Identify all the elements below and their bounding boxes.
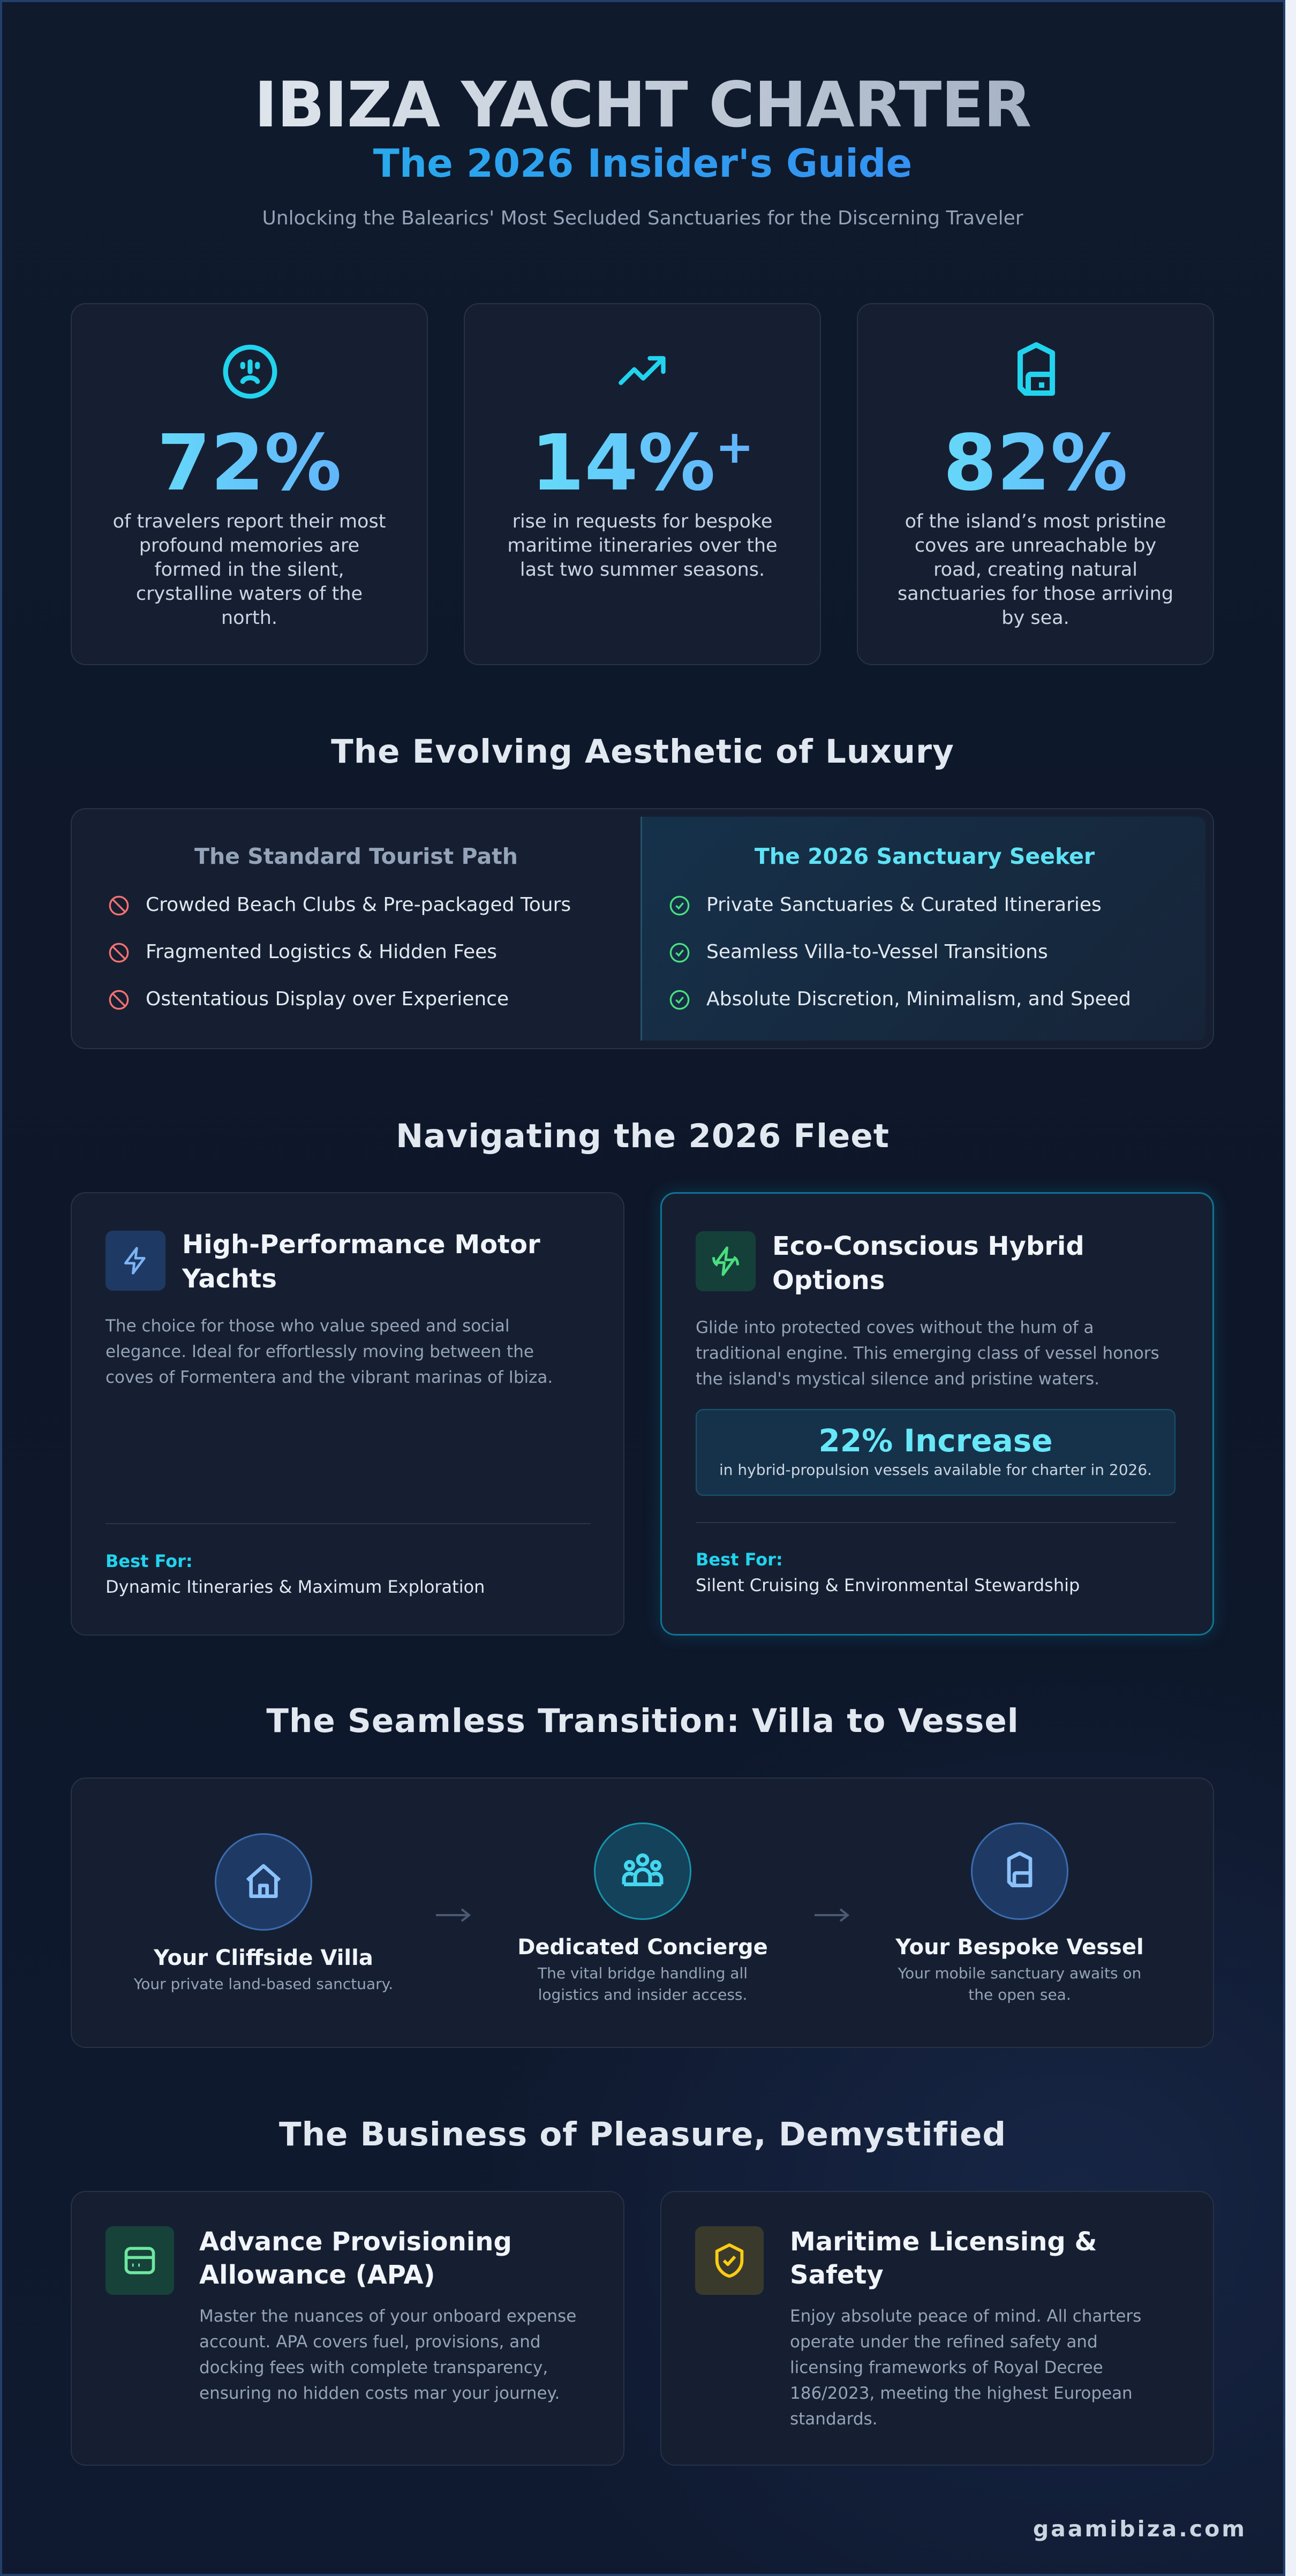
step: villa (134, 1833, 393, 1993)
icon: people (594, 1822, 691, 1920)
stat 82%: 82% (943, 418, 1128, 508)
label: Your Bespoke Vessel (895, 1935, 1144, 1960)
panel: transition flow (71, 1777, 1214, 2048)
title (2, 67, 1283, 142)
panel: licensing (660, 2191, 1214, 2466)
icon: vessel (971, 1822, 1068, 1920)
description: coves of Formentera and the vibrant marinas of Ibiza. (106, 1368, 553, 1387)
description: docking fees with complete transparency, (199, 2358, 548, 2377)
item (669, 988, 1131, 1010)
stat 82% (858, 424, 1213, 501)
sub (538, 1964, 748, 2003)
description: rise in requests for bespoke (513, 511, 772, 532)
description: traditional engine. This emerging class of vessel honors (696, 1344, 1159, 1363)
description: north. (221, 607, 277, 629)
icon: bolt (106, 1231, 165, 1291)
description: maritime itineraries over the (507, 535, 778, 556)
icon: vessel (1018, 342, 1055, 396)
footer: website: gaamibiza.com (1033, 2516, 1247, 2542)
icon: eco bolt (696, 1231, 756, 1291)
panel: hybrid (660, 1192, 1214, 1636)
panel: APA (71, 2191, 624, 2466)
description: sanctuaries for those arriving (898, 583, 1173, 605)
highlighted right half (641, 817, 1205, 1041)
panel: comparison: Ostentatious Display over Experience (146, 988, 509, 1010)
icon: house (215, 1833, 312, 1931)
description: formed in the silent, (154, 559, 344, 581)
stat card: 14% (464, 303, 821, 665)
description: standards. (790, 2409, 878, 2429)
callout: 22% increase: 22% Increase (818, 1422, 1053, 1459)
item (109, 988, 509, 1010)
step: vessel (895, 1822, 1144, 2003)
callout: 22% increase: in hybrid-propulsion vessels available for charter in 2026. (719, 1461, 1152, 1479)
subtitle (2, 139, 1283, 187)
description (696, 1318, 1159, 1389)
item (669, 941, 1048, 963)
sub: Your private land-based sanctuary. (134, 1975, 393, 1993)
stat 14%+ (465, 424, 820, 501)
heading: High-Performance Motor Yachts (182, 1230, 540, 1294)
subtitle: The 2026 Insider's Guide (373, 141, 912, 186)
description: profound memories are (139, 535, 359, 556)
description: of the island’s most pristine (905, 511, 1166, 532)
sub: Your mobile sanctuary awaits on (898, 1964, 1141, 1982)
sub: The vital bridge handling all (538, 1964, 748, 1982)
description: 186/2023, meeting the highest European (790, 2384, 1133, 2403)
heading: business: The Business of Pleasure, Demystified (279, 2115, 1006, 2153)
heading: Eco-Conscious Hybrid Options (772, 1231, 1084, 1295)
step: concierge (517, 1822, 768, 2003)
stat 72%: 72% (157, 418, 342, 508)
arrow (815, 1909, 849, 1922)
heading: Maritime Licensing & Safety (790, 2227, 1097, 2290)
label: Dedicated Concierge (517, 1935, 768, 1960)
description: crystalline waters of the (136, 583, 363, 605)
description: licensing frameworks of Royal Decree (790, 2358, 1103, 2377)
panel: comparison (71, 808, 1214, 1049)
item (669, 894, 1102, 916)
sub: logistics and insider access. (538, 1986, 747, 2003)
stat card: 72% (71, 303, 428, 665)
description (105, 1316, 553, 1387)
heading: evolving aesthetic: The Evolving Aesthetic of Luxury (331, 733, 954, 771)
best for text: Dynamic Itineraries & Maximum Exploration (106, 1577, 485, 1597)
description: last two summer seasons. (520, 559, 765, 581)
panel: motor yachts (71, 1192, 624, 1636)
highlighted right half: Absolute Discretion, Minimalism, and Speed (706, 988, 1131, 1010)
description: Enjoy absolute peace of mind. All charters (790, 2307, 1141, 2326)
description (790, 2303, 1141, 2432)
panel: comparison: Crowded Beach Clubs & Pre-packaged Tours (146, 894, 571, 916)
best for text: Silent Cruising & Environmental Stewardship (696, 1575, 1080, 1595)
stat 14%+: 14%+ (531, 418, 754, 508)
description: the island's mystical silence and pristine waters. (696, 1369, 1099, 1389)
arrow (436, 1909, 471, 1922)
best for: Best For: (106, 1551, 193, 1571)
icon: card (106, 2226, 174, 2295)
description: The choice for those who value speed and social (106, 1316, 510, 1336)
description: Glide into protected coves without the hum of a (696, 1318, 1094, 1337)
callout: 22% increase (696, 1409, 1176, 1496)
best for: Best For: (696, 1549, 783, 1570)
panel: comparison: Fragmented Logistics & Hidden Fees (146, 941, 497, 963)
sub: the open sea. (968, 1986, 1071, 2003)
description: account. APA covers fuel, provisions, and (199, 2332, 541, 2352)
description: of travelers report their most (113, 511, 386, 532)
heading: fleet: Navigating the 2026 Fleet (396, 1117, 890, 1155)
icon: face (223, 345, 277, 398)
icon: trend (619, 356, 666, 385)
stat 72% (72, 424, 427, 501)
icon: shield (695, 2226, 764, 2295)
description (199, 2303, 576, 2406)
item (109, 941, 497, 963)
description: by sea. (1001, 607, 1069, 629)
heading: standard path: The Standard Tourist Path (194, 843, 518, 869)
description: coves are unreachable by (915, 535, 1156, 556)
stat card: 82% (857, 303, 1214, 665)
title: IBIZA YACHT CHARTER (254, 68, 1031, 141)
description: elegance. Ideal for effortlessly moving between the (106, 1342, 534, 1361)
highlighted right half: Seamless Villa-to-Vessel Transitions (706, 941, 1048, 963)
item (109, 894, 571, 916)
tagline: Unlocking the Balearics' Most Secluded Sanctuaries for the Discerning Traveler (262, 207, 1023, 229)
highlighted right half: Private Sanctuaries & Curated Itineraries (706, 894, 1102, 916)
description: operate under the refined safety and (790, 2332, 1098, 2352)
description: ensuring no hidden costs mar your journey. (199, 2384, 560, 2403)
heading: sanctuary seeker: The 2026 Sanctuary Seeker (755, 843, 1095, 869)
description: Master the nuances of your onboard expense (199, 2307, 576, 2326)
label: Your Cliffside Villa (154, 1946, 373, 1970)
description: road, creating natural (933, 559, 1137, 581)
description (507, 511, 778, 581)
heading: Advance Provisioning Allowance (APA) (199, 2227, 512, 2290)
sub (898, 1964, 1141, 2003)
description (898, 511, 1173, 629)
description (113, 511, 386, 629)
heading: transition: The Seamless Transition: Villa to Vessel (266, 1702, 1019, 1740)
